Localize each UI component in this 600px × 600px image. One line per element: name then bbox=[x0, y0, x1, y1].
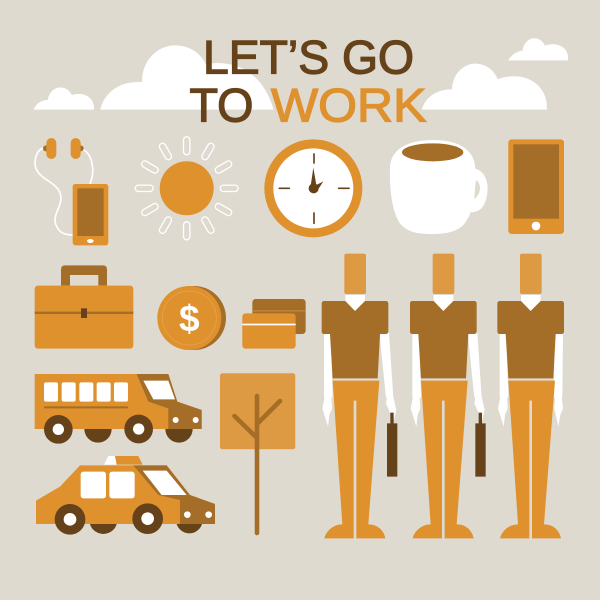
title: LET’S GO bbox=[203, 30, 414, 84]
person 1 with bag bbox=[322, 254, 397, 538]
icon: coffee mug bbox=[390, 140, 488, 234]
title: WORK bbox=[271, 78, 426, 132]
icon: clock bbox=[264, 139, 362, 237]
icon: dollar coin bbox=[157, 286, 226, 350]
icon: tree bbox=[220, 373, 295, 533]
person 3 bbox=[497, 254, 564, 538]
icon: bus bbox=[35, 374, 202, 444]
clouds bbox=[34, 38, 568, 110]
person 2 with bag bbox=[410, 254, 486, 538]
icon: sun bbox=[135, 137, 238, 240]
icon: briefcase bbox=[35, 265, 133, 349]
icon: credit cards bbox=[242, 299, 306, 349]
title bbox=[190, 30, 426, 132]
icon: phone with earphones bbox=[35, 138, 108, 245]
icon: tablet bbox=[508, 139, 564, 234]
icon: taxi bbox=[36, 456, 215, 535]
icon: dollar coin: $ bbox=[179, 298, 200, 339]
title: TO bbox=[190, 78, 254, 132]
